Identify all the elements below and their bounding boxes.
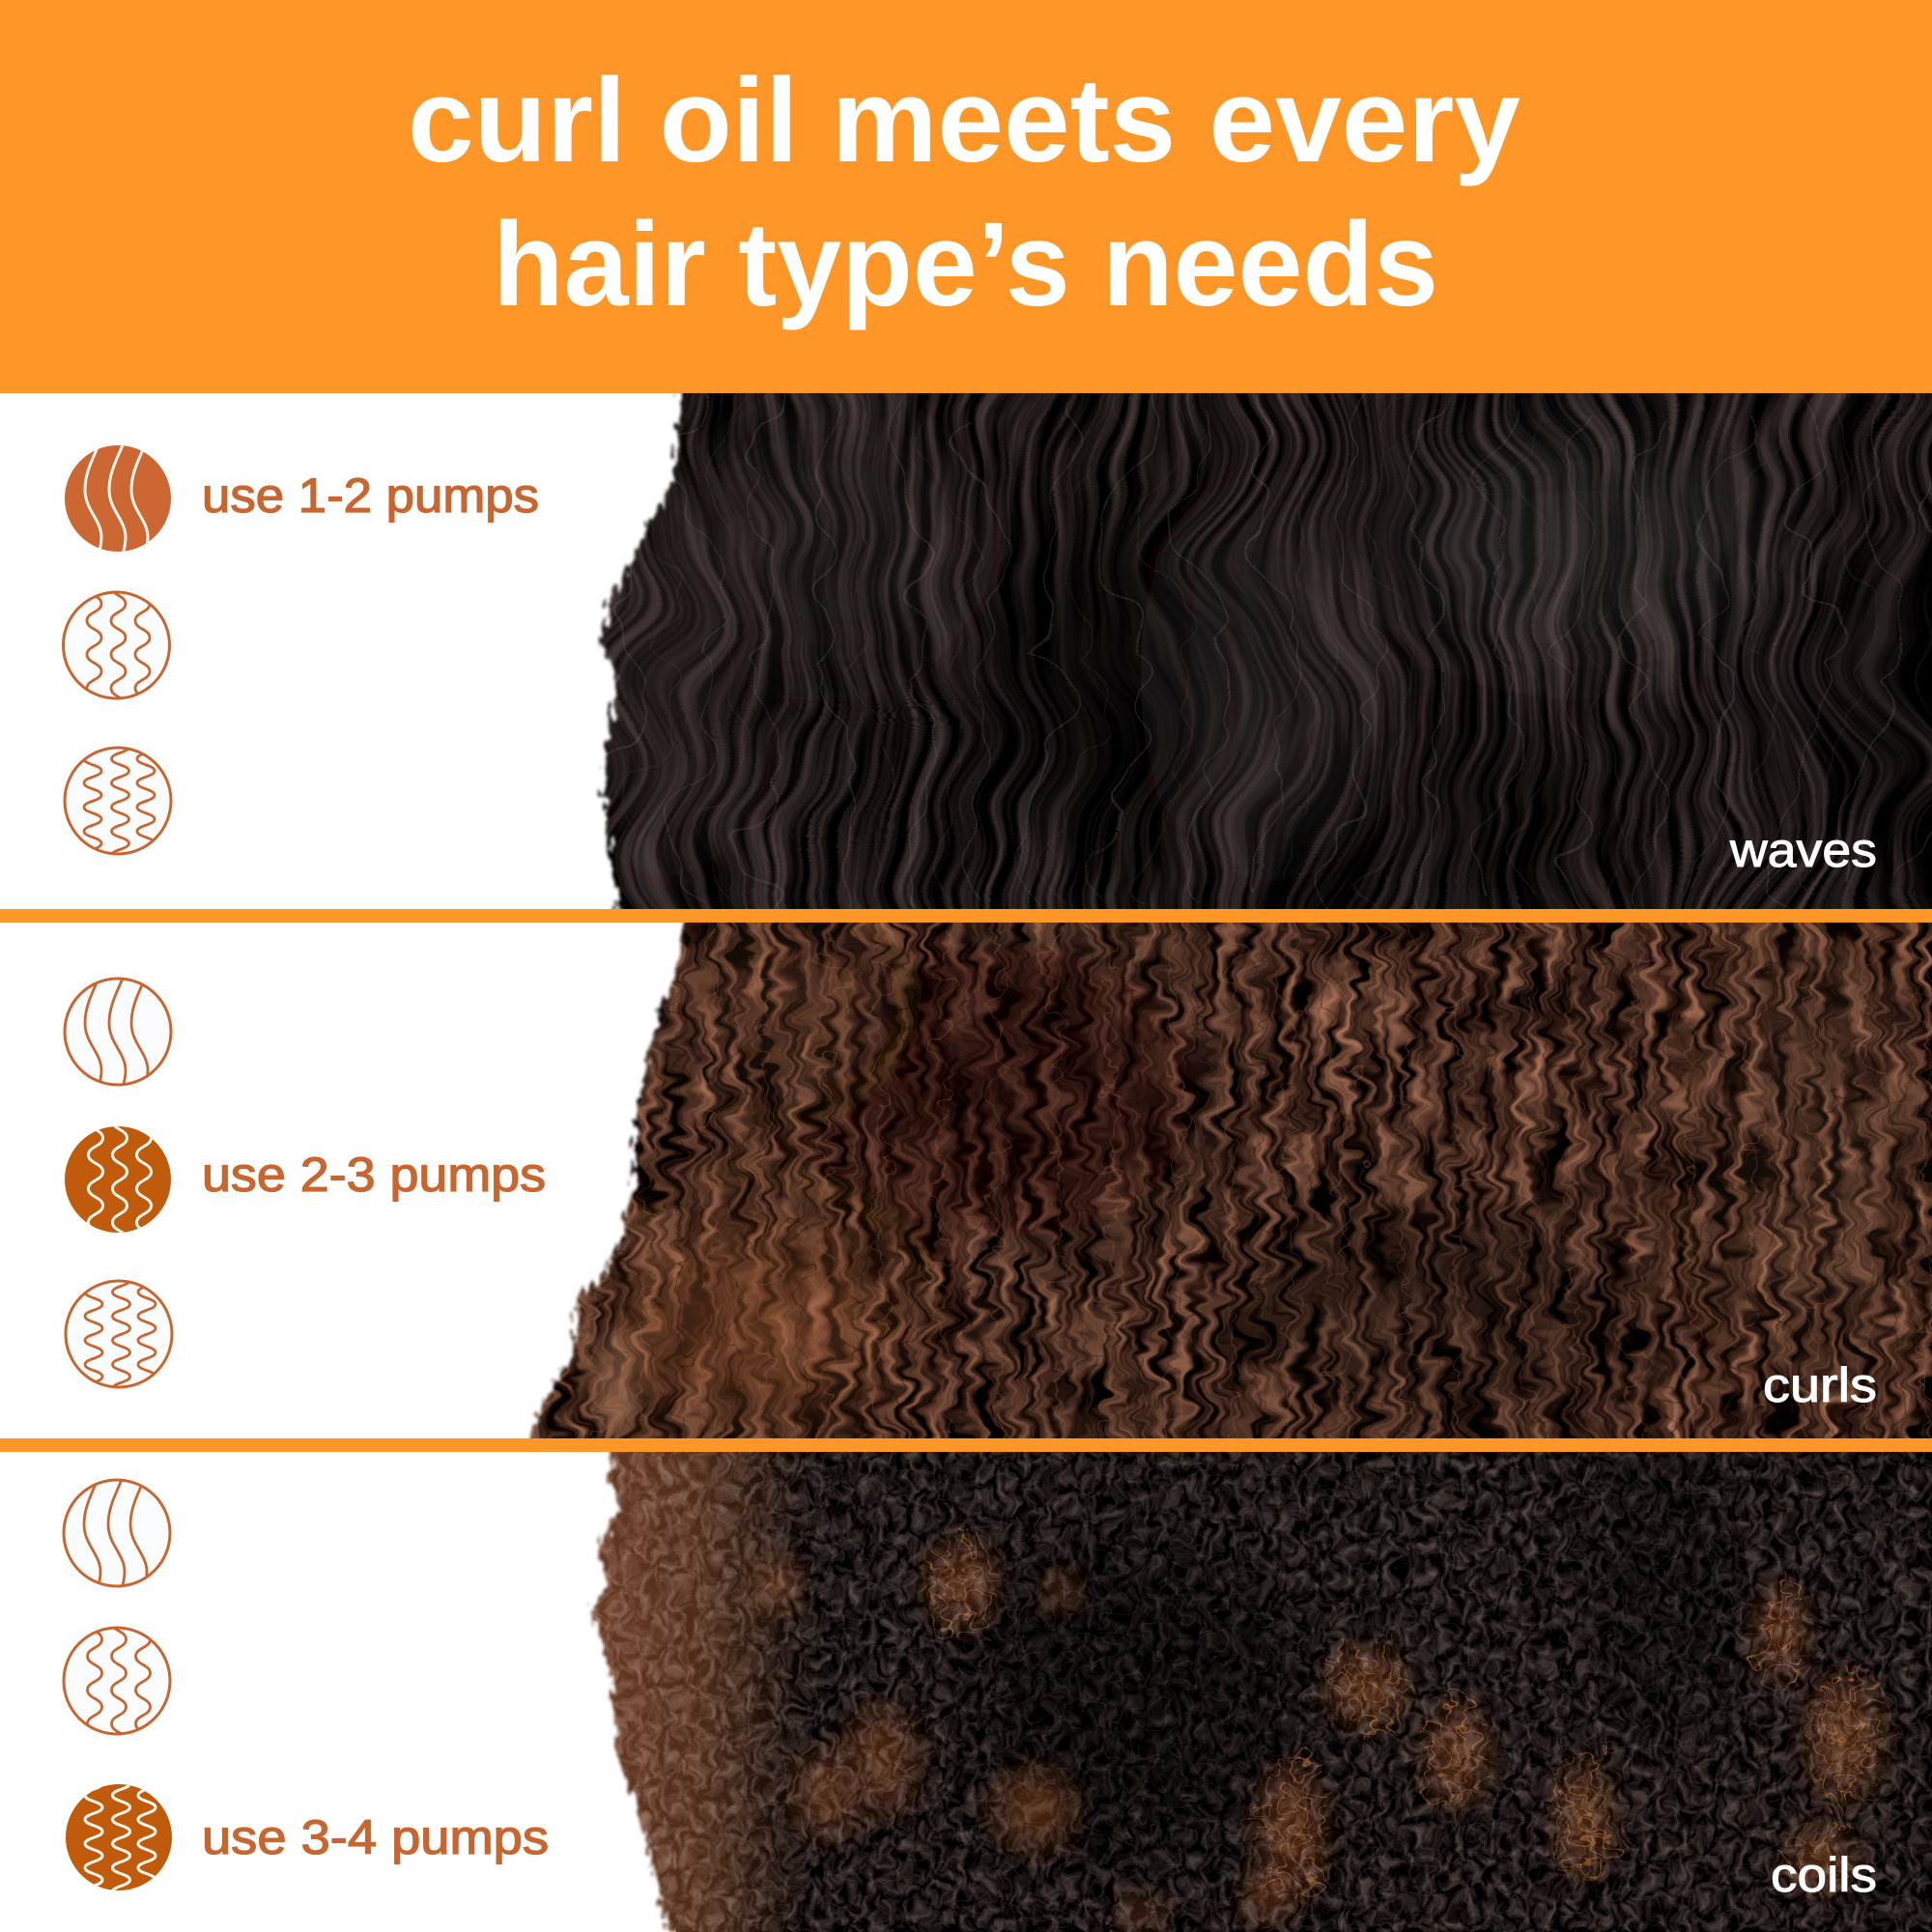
brown curl patches	[754, 1533, 1888, 1930]
divider bar: curls / coils	[0, 1438, 1932, 1452]
icon: curls outline	[64, 1623, 170, 1741]
title: hair type’s needs	[493, 199, 1438, 331]
icon: coils selected	[66, 1783, 172, 1891]
panel: coils row	[64, 1477, 549, 1891]
skin tone behind curl tuft	[599, 1328, 638, 1435]
photo: waves hair	[522, 393, 1932, 909]
label: use 1-2 pumps: use 1-2 pumps	[202, 469, 539, 523]
panel: curls row	[65, 976, 546, 1389]
icon: waves outline	[64, 1477, 170, 1589]
label: waves: waves	[1729, 823, 1877, 877]
icon: coils outline	[66, 1280, 172, 1389]
icon: curls selected	[65, 1121, 171, 1239]
icon: curls outline	[64, 587, 170, 705]
photo: coils hair	[522, 1430, 1932, 1932]
title	[408, 55, 1520, 331]
header banner	[0, 0, 1932, 393]
panel: waves row	[64, 442, 539, 856]
icon: waves outline	[65, 976, 171, 1088]
label: coils: coils	[1771, 1848, 1877, 1902]
title: curl oil meets every	[408, 55, 1520, 187]
label: use 2-3 pumps: use 2-3 pumps	[202, 1148, 546, 1202]
divider bar: waves / curls	[0, 909, 1932, 923]
icon: waves selected	[65, 442, 171, 554]
label: curls: curls	[1763, 1358, 1877, 1412]
icon: coils outline	[65, 747, 171, 856]
photo: curls hair	[522, 923, 1932, 1438]
label: use 3-4 pumps: use 3-4 pumps	[202, 1810, 549, 1864]
